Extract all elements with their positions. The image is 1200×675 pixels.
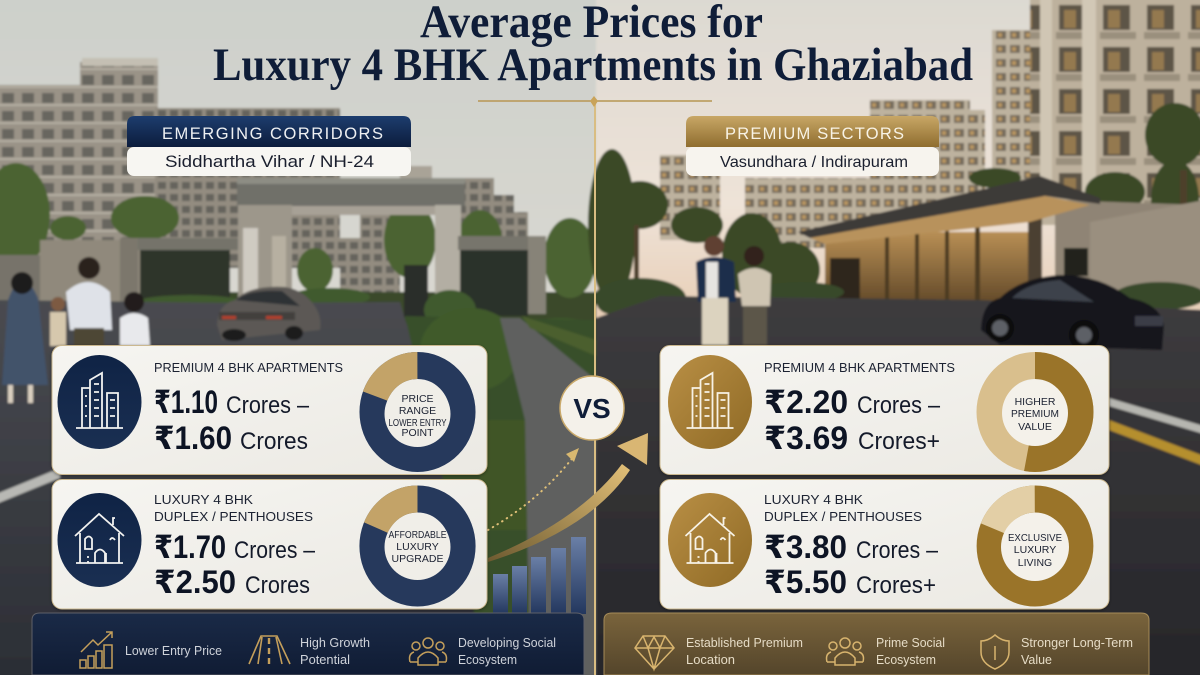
- couple walking: [696, 236, 771, 345]
- price range: [154, 384, 310, 456]
- text: prime social ecosystem: Ecosystem: [876, 652, 936, 667]
- price range: ₹2.50: [154, 564, 236, 600]
- donut: higher premium value: HIGHER: [1015, 396, 1056, 408]
- price range: ₹3.69: [764, 420, 848, 456]
- family walking: [2, 257, 150, 403]
- icon: growth chart: [80, 632, 112, 668]
- text: high growth potential: Potential: [300, 652, 350, 667]
- apartment label: PREMIUM 4 BHK APARTMENTS: [764, 361, 955, 375]
- price range: ₹2.20: [764, 384, 848, 420]
- donut: higher premium value: VALUE: [1018, 421, 1052, 433]
- donut: exclusive luxury living: LIVING: [1018, 557, 1052, 569]
- badge: emerging corridors: [127, 116, 411, 176]
- duplex label: [764, 493, 922, 524]
- badge: emerging corridors: EMERGING CORRIDORS: [162, 125, 383, 143]
- icon: shield: [981, 635, 1009, 669]
- icon: house gold: [668, 493, 752, 587]
- badge: premium sectors: [686, 116, 939, 176]
- title: [213, 0, 973, 91]
- vs badge: [560, 376, 624, 440]
- donut: exclusive luxury living: EXCLUSIVE: [1008, 532, 1062, 544]
- panel: emerging luxury duplex: [52, 480, 487, 609]
- text: high growth potential: High Growth: [300, 635, 370, 650]
- price range: [764, 384, 941, 456]
- donut: affordable luxury: AFFORDABLE: [388, 529, 446, 541]
- arrow: gold growth: [488, 433, 648, 562]
- duplex label: LUXURY 4 BHK: [764, 493, 864, 507]
- text: prime social ecosystem: [876, 635, 945, 667]
- donut: price range: [360, 352, 475, 472]
- duplex label: [154, 493, 313, 524]
- donut: higher premium value: [990, 366, 1080, 458]
- price range: Crores+: [856, 572, 936, 599]
- donut: exclusive luxury living: LUXURY: [1014, 544, 1056, 556]
- panel: emerging premium apartments: [52, 346, 487, 474]
- silver car: [217, 287, 320, 341]
- price range: [764, 529, 939, 600]
- price range: Crores –: [226, 392, 310, 419]
- center divider: [478, 96, 712, 675]
- donut: price range: PRICE: [401, 393, 434, 405]
- badge: premium sectors: PREMIUM SECTORS: [725, 125, 904, 143]
- icon: road: [249, 636, 290, 664]
- donut: price range: RANGE: [399, 405, 436, 417]
- price range: Crores –: [856, 537, 939, 564]
- text: established premium location: Location: [686, 652, 735, 667]
- donut: higher premium value: PREMIUM: [1011, 408, 1059, 420]
- text: stronger long-term value: Value: [1021, 652, 1052, 667]
- icon: apartment towers gold: [668, 355, 752, 449]
- price range: ₹3.80: [764, 529, 847, 565]
- background scene: premium sectors photo: [588, 0, 1200, 675]
- panel: premium apartments: [660, 346, 1109, 474]
- text: established premium location: [686, 635, 803, 667]
- black car: [981, 275, 1164, 350]
- text: established premium location: Established Premium: [686, 635, 803, 650]
- donut: affordable luxury: LUXURY: [396, 541, 439, 553]
- donut: exclusive luxury living: [976, 485, 1094, 607]
- price range: Crores+: [858, 428, 940, 455]
- price range: Crores: [245, 572, 310, 599]
- icon: community: [410, 638, 446, 665]
- footer panel: premium highlights: [604, 613, 1149, 675]
- icon: apartment towers: [58, 355, 142, 449]
- price range: ₹1.70: [154, 529, 226, 565]
- apartment label: PREMIUM 4 BHK APARTMENTS: [154, 361, 343, 375]
- badge: emerging corridors: Siddhartha Vihar / NH-24: [165, 152, 374, 171]
- donut: affordable luxury: [358, 484, 477, 608]
- vs badge: VS: [573, 393, 611, 424]
- text: lower entry price: Lower Entry Price: [125, 643, 222, 658]
- price range: ₹1.10: [154, 384, 218, 420]
- donut: price range: LOWER ENTRY: [388, 417, 446, 429]
- price range: ₹5.50: [764, 564, 847, 600]
- footer panel: emerging highlights: [32, 613, 584, 675]
- text: stronger long-term value: Stronger Long-Term: [1021, 635, 1133, 650]
- price range: Crores –: [857, 392, 941, 419]
- price range: Crores: [240, 428, 308, 455]
- title: Luxury 4 BHK Apartments in Ghaziabad: [213, 39, 973, 91]
- text: prime social ecosystem: Prime Social: [876, 635, 945, 650]
- text: high growth potential: [300, 635, 370, 667]
- text: developing social ecosystem: Developing Social: [458, 635, 556, 650]
- donut: affordable luxury: UPGRADE: [392, 553, 443, 565]
- price range: ₹1.60: [154, 420, 232, 456]
- icon: community: [826, 638, 864, 665]
- duplex label: DUPLEX / PENTHOUSES: [764, 510, 922, 524]
- growth bars: [493, 537, 586, 614]
- icon: diamond: [635, 636, 674, 669]
- text: developing social ecosystem: Ecosystem: [458, 652, 517, 667]
- text: developing social ecosystem: [458, 635, 556, 667]
- panel: premium luxury duplex: [660, 480, 1109, 609]
- price range: Crores –: [234, 537, 316, 564]
- icon: house: [58, 493, 142, 587]
- badge: premium sectors: Vasundhara / Indirapuram: [720, 154, 908, 171]
- text: stronger long-term value: [1021, 635, 1133, 667]
- duplex label: LUXURY 4 BHK: [154, 493, 254, 507]
- duplex label: DUPLEX / PENTHOUSES: [154, 510, 313, 524]
- price range: [154, 529, 316, 600]
- donut: price range: POINT: [401, 427, 434, 439]
- arrow: dotted growth: [488, 448, 579, 530]
